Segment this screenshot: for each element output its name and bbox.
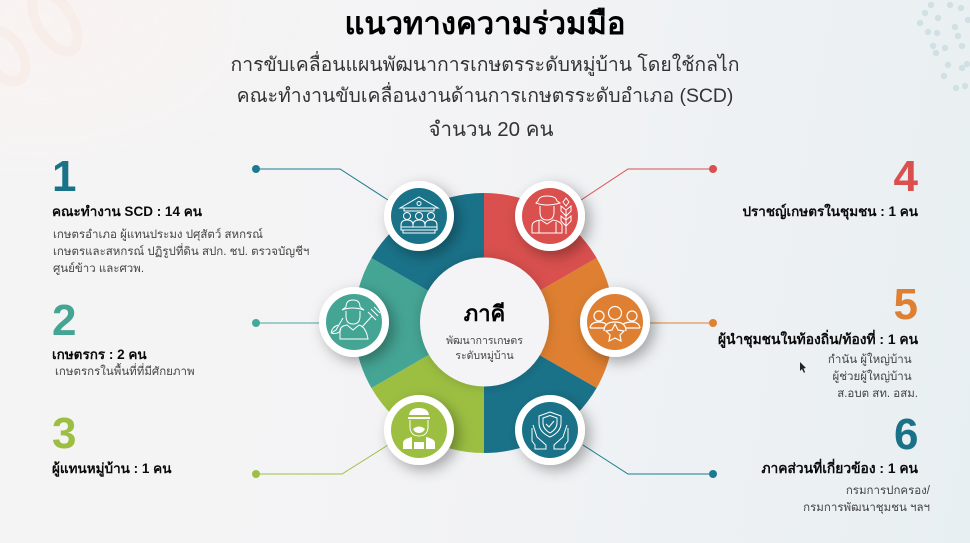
- segment: dark teal right: [484, 323, 597, 453]
- icon: village representative: [384, 395, 454, 465]
- center circle: [420, 258, 549, 386]
- heading 5: ผู้นำชุมชนในท้องถิ่น/ท้องที่ : 1 คน: [718, 332, 918, 347]
- subtitle: [230, 51, 740, 107]
- segment: orange: [484, 258, 614, 388]
- heading 2: เกษตรกร : 2 คน: [52, 347, 147, 362]
- number 4: 4: [894, 152, 918, 201]
- subtitle: การขับเคลื่อนแผนพัฒนาการเกษตรระดับหมู่บ้าน โดยใช้กลไก: [230, 54, 740, 76]
- center label: description: ระดับหมู่บ้าน: [455, 350, 514, 362]
- number 1: 1: [52, 152, 76, 201]
- description 5: [828, 352, 918, 400]
- description 6: กรมการพัฒนาชุมชน ฯลฯ: [803, 502, 930, 514]
- center label: heading: ภาคี: [464, 301, 505, 326]
- block 6: [761, 410, 930, 514]
- block 2: [52, 296, 195, 378]
- segment: teal: [354, 258, 484, 388]
- description 5: ส.อบต สท. อสม.: [837, 388, 918, 400]
- heading 1: คณะทำงาน SCD : 14 คน: [52, 204, 202, 219]
- icon: farmer with fork: [319, 287, 389, 357]
- number 6: 6: [894, 410, 918, 459]
- number 5: 5: [894, 280, 918, 329]
- description 1: [53, 228, 309, 275]
- block 3: [52, 409, 172, 477]
- icon: community leaders with star: [580, 287, 650, 357]
- description 5: กำนัน ผู้ใหญ่บ้าน: [828, 354, 912, 366]
- description 6: [803, 485, 930, 514]
- description 6: กรมการปกครอง/: [846, 485, 930, 497]
- segment: red: [484, 193, 597, 323]
- subtitle: คณะทำงานขับเคลื่อนงานด้านการเกษตรระดับอำเภอ (SCD): [237, 85, 733, 107]
- description 1: เกษตรและสหกรณ์ ปฏิรูปที่ดิน สปก. ชป. ตรวจบัญชีฯ: [53, 246, 309, 258]
- heading 3: ผู้แทนหมู่บ้าน : 1 คน: [52, 461, 171, 476]
- heading 6: ภาคส่วนที่เกี่ยวข้อง : 1 คน: [761, 461, 918, 476]
- block 4: [742, 152, 918, 220]
- description 1: ศูนย์ข้าว และศวพ.: [53, 263, 144, 275]
- block 5: [718, 280, 918, 400]
- member count: จำนวน 20 คน: [428, 118, 553, 141]
- heading 4: ปราชญ์เกษตรในชุมชน : 1 คน: [742, 204, 918, 219]
- icon: farmer with wheat: [515, 181, 585, 251]
- center label: description: พัฒนาการเกษตร: [446, 335, 523, 347]
- title: แนวทางความร่วมมือ: [344, 6, 626, 41]
- segment: green: [371, 323, 484, 453]
- icon: government building and people: [384, 181, 454, 251]
- number 2: 2: [52, 296, 76, 345]
- description 2: เกษตรกรในพื้นที่ที่มีศักยภาพ: [55, 366, 195, 378]
- segment: dark teal left: [371, 193, 484, 323]
- block 1: [52, 152, 309, 275]
- description 5: ผู้ช่วยผู้ใหญ่บ้าน: [833, 371, 912, 383]
- number 3: 3: [52, 409, 76, 458]
- center label: description: [446, 335, 523, 362]
- icon: hands protecting shield: [515, 395, 585, 465]
- description 1: เกษตรอำเภอ ผู้แทนประมง ปศุสัตว์ สหกรณ์: [53, 229, 263, 241]
